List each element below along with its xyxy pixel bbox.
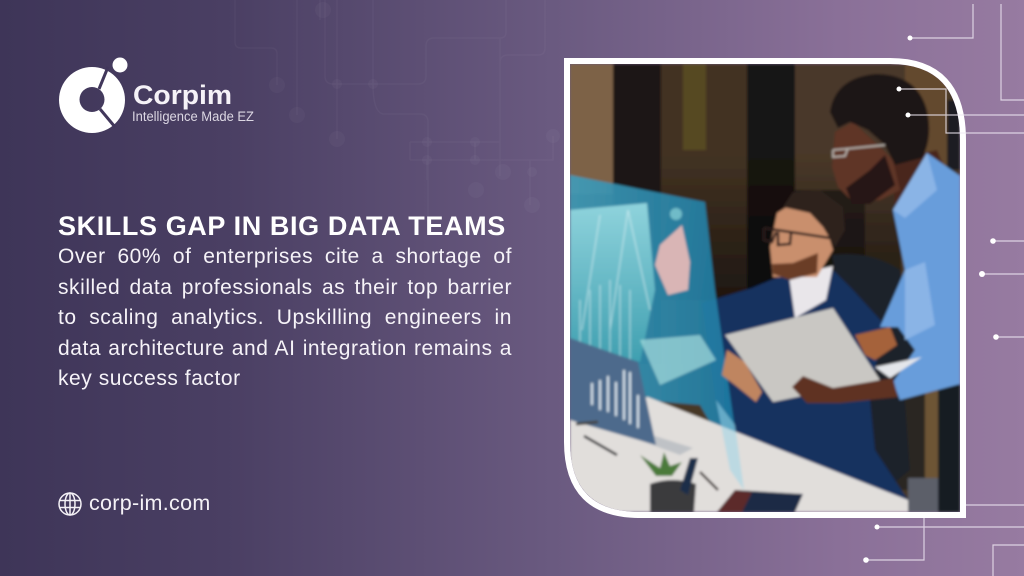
standing man: glasses (833, 145, 885, 157)
body text: key success factor (58, 367, 241, 390)
standing man: neck (894, 150, 942, 202)
holographic chart panel (570, 203, 682, 362)
seated man: hand (722, 350, 762, 402)
office wall and curtains (570, 64, 960, 512)
seated man: hair (783, 190, 845, 247)
potted plant (640, 452, 698, 512)
logo (59, 58, 254, 133)
seated man: suit (702, 270, 908, 500)
standing man: face (832, 122, 900, 202)
lower hologram desk reflection (640, 335, 716, 385)
standing man: right hand (855, 327, 897, 360)
standing man: shirt (880, 153, 960, 400)
body text (58, 245, 512, 390)
body text: to scaling analytics. Upskilling engineers in (58, 306, 512, 329)
laptop keyboard (649, 436, 692, 456)
hologram light beam over desk (716, 400, 744, 490)
office chair (832, 254, 915, 495)
logo wordmark: Corpim (133, 80, 232, 110)
logo tagline: Intelligence Made EZ (132, 109, 254, 124)
photo frame (564, 58, 966, 518)
icon: globe (58, 492, 82, 516)
holographic screen (570, 173, 736, 431)
seated man: face (770, 203, 833, 277)
standing man: hair (830, 74, 929, 165)
body text: skilled data professionals as their top barrier (58, 276, 512, 298)
desk items: pens and phone (576, 422, 803, 512)
standing man: collar and sleeve shading (893, 153, 937, 340)
tablet held by men (725, 308, 880, 402)
body text: data architecture and AI integration remains a (58, 336, 512, 360)
photo: two engineers at holographic display (570, 64, 960, 512)
heading: SKILLS GAP IN BIG DATA TEAMS (58, 211, 506, 241)
white desk (570, 397, 908, 512)
body text: Over 60% of enterprises cite a shortage of (58, 245, 512, 268)
logo mark: ring with dot (59, 58, 128, 133)
seated man: glasses (764, 228, 830, 245)
seated man: shirt (789, 266, 833, 318)
laptop screen (570, 338, 656, 445)
standing man: beard (846, 155, 895, 204)
paper (875, 357, 922, 378)
standing man: arm and hand (792, 376, 898, 403)
website url: corp-im.com (89, 491, 211, 515)
photo white border (567, 61, 963, 515)
hologram hand (655, 225, 690, 295)
seated man: beard (772, 253, 818, 280)
